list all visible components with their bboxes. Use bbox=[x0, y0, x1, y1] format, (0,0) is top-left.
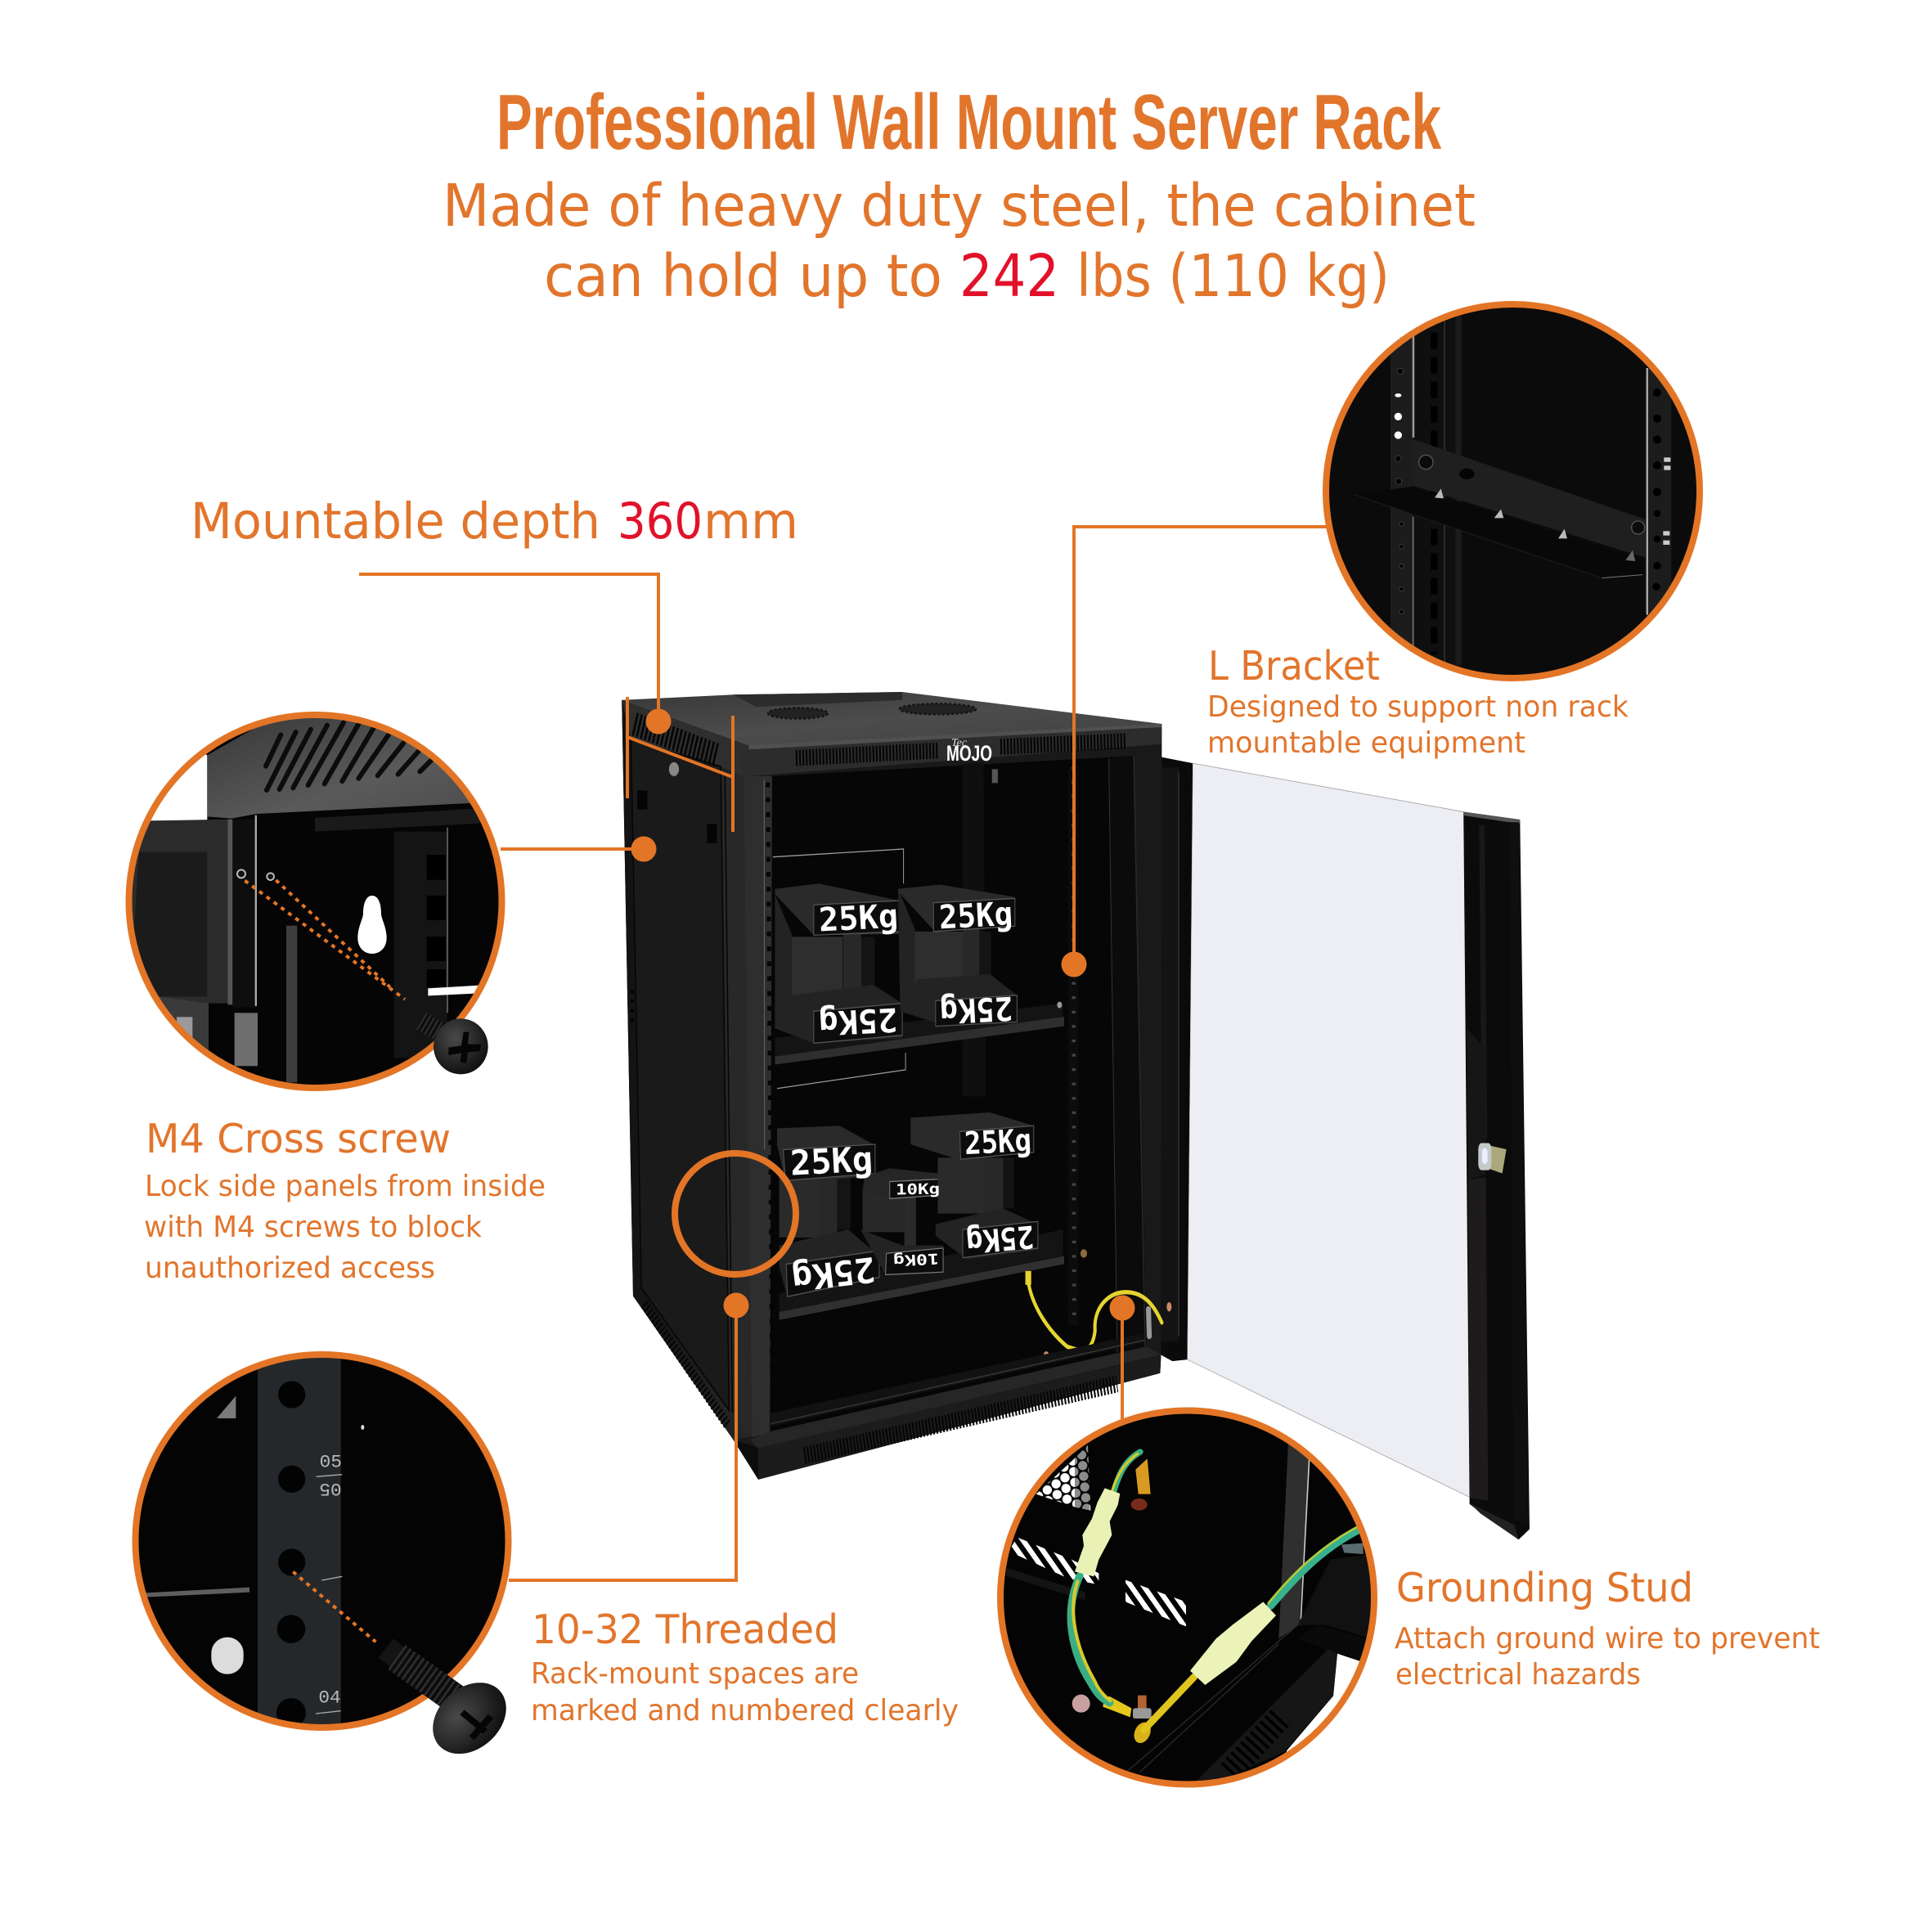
heading: mountable depth: Mountable depth bbox=[191, 492, 600, 550]
cabinet backing silhouette bbox=[622, 700, 1161, 1480]
door of the cabinet with glass panel bbox=[1134, 752, 1530, 1539]
weight labels: 10Kg bbox=[892, 1250, 939, 1269]
door hinge-side frame bbox=[1134, 752, 1193, 1361]
leader: mountable depth bbox=[359, 574, 733, 832]
detail circle: M4 cross screw bbox=[126, 712, 505, 1091]
weight 10 kg bbox=[860, 1168, 944, 1274]
glass pane bbox=[1188, 763, 1471, 1498]
detail circle: 10-32 threaded: 05 bbox=[319, 1478, 342, 1498]
detail circle: L bracket bbox=[1323, 301, 1703, 681]
caption: grounding stud: electrical hazards bbox=[1395, 1658, 1641, 1692]
front bezel bbox=[742, 724, 1161, 776]
weight labels: 25Kg bbox=[789, 1139, 874, 1184]
detail circle: 10-32 threaded: 04 bbox=[318, 1688, 341, 1709]
latch bolt bbox=[1478, 1143, 1507, 1173]
leader: grounding stud bbox=[1109, 1296, 1135, 1419]
subtitle: second line with weight capacity: 242 bbox=[959, 242, 1059, 310]
subtitle: first line: Made of heavy duty steel, the cabinet bbox=[443, 172, 1476, 240]
stud and terminals bbox=[1072, 1695, 1090, 1713]
icon: rack screw bbox=[386, 1648, 520, 1768]
lower shelf bbox=[780, 1229, 1063, 1312]
weight labels bbox=[789, 896, 1036, 1299]
weight 25 kg lower right bbox=[910, 1112, 1038, 1260]
screw guide line bbox=[293, 1572, 375, 1642]
weight labels: 25Kg bbox=[964, 1219, 1036, 1260]
lower side vents bbox=[645, 1304, 728, 1426]
bottom frame and base bbox=[750, 1346, 1161, 1449]
caption: grounding stud: Grounding Stud bbox=[1396, 1565, 1693, 1611]
detail circle: 10-32 threaded: 05 bbox=[320, 1452, 342, 1472]
weight labels: 25Kg bbox=[964, 1122, 1032, 1161]
caption: 10-32 threaded: Rack-mount spaces are bbox=[531, 1657, 859, 1691]
caption: M4 cross screw: with M4 screws to block bbox=[144, 1211, 482, 1244]
heading: mountable depth: mm bbox=[703, 492, 798, 550]
weight labels: 25Kg bbox=[818, 1000, 898, 1041]
heading: mountable depth: 360 bbox=[618, 492, 703, 550]
leader: L bracket bbox=[1062, 527, 1329, 977]
weight labels: 10Kg bbox=[896, 1181, 940, 1198]
weight labels: 25Kg bbox=[789, 1249, 878, 1299]
keyhole bbox=[357, 896, 387, 954]
logo on bezel bbox=[946, 737, 992, 766]
title: Professional Wall Mount Server Rack bbox=[496, 79, 1441, 166]
caption: grounding stud bbox=[1395, 1565, 1820, 1692]
interior bbox=[769, 756, 1147, 1431]
leader: 10-32 threaded with side ring bbox=[509, 1153, 796, 1580]
door latch-side frame bbox=[1463, 811, 1530, 1539]
icon: M4 screw bbox=[421, 1018, 488, 1074]
wires bbox=[1071, 1452, 1359, 1730]
caption: 10-32 threaded: 10-32 Threaded bbox=[532, 1606, 838, 1653]
weight labels: 25Kg bbox=[938, 896, 1013, 937]
leader: M4 screw bbox=[501, 836, 656, 862]
server cabinet bbox=[622, 692, 1161, 1480]
subtitle: second line with weight capacity bbox=[544, 242, 1390, 310]
caption: M4 cross screw: Lock side panels from inside bbox=[145, 1170, 546, 1203]
connector sleeves bbox=[1075, 1488, 1120, 1576]
weight labels: 25Kg bbox=[818, 897, 899, 939]
left front rail bbox=[744, 776, 772, 1437]
weight 25 kg lower left bbox=[777, 1126, 879, 1297]
logo on bezel: Tec bbox=[951, 737, 968, 749]
caption: M4 cross screw: M4 Cross screw bbox=[146, 1116, 451, 1162]
grounding wire inside cabinet bbox=[1026, 1249, 1161, 1358]
caption: M4 cross screw: unauthorized access bbox=[145, 1251, 435, 1285]
screw hole guide lines bbox=[245, 880, 405, 1000]
weight 25 kg upper right bbox=[898, 885, 1017, 1027]
back wall outlines bbox=[773, 849, 904, 883]
right rail bbox=[1646, 368, 1671, 613]
detail circle: 10-32 threaded bbox=[133, 1351, 512, 1754]
caption: 10-32 threaded: marked and numbered clearly bbox=[531, 1694, 959, 1728]
side panel bbox=[622, 700, 750, 1440]
caption: L bracket: L Bracket bbox=[1208, 643, 1380, 690]
right rail bbox=[1068, 766, 1078, 1325]
caption: L bracket: Designed to support non rack bbox=[1207, 690, 1629, 724]
L bracket bbox=[1413, 439, 1646, 558]
top surface with fans bbox=[622, 692, 1161, 745]
subtitle: second line with weight capacity: can hold up to bbox=[544, 242, 942, 310]
subtitle: second line with weight capacity: lbs (110 kg) bbox=[1076, 242, 1390, 310]
caption: L bracket: mountable equipment bbox=[1207, 726, 1525, 760]
caption: L bracket bbox=[1207, 643, 1629, 760]
door edge panel bbox=[1278, 1442, 1310, 1638]
logo on bezel: MOJO bbox=[946, 741, 992, 766]
top side vents bbox=[635, 724, 717, 755]
caption: grounding stud: Attach ground wire to prevent bbox=[1395, 1622, 1820, 1656]
detail circle: grounding stud bbox=[997, 1407, 1377, 1788]
upper shelf bbox=[775, 1004, 1063, 1057]
weight 25 kg upper left bbox=[775, 883, 902, 1043]
caption: 10-32 threaded bbox=[531, 1606, 959, 1728]
weight labels: 25Kg bbox=[939, 989, 1013, 1030]
white background lower right bbox=[1286, 1654, 1359, 1752]
caption: M4 cross screw bbox=[144, 1116, 546, 1285]
heading: mountable depth bbox=[191, 492, 798, 550]
